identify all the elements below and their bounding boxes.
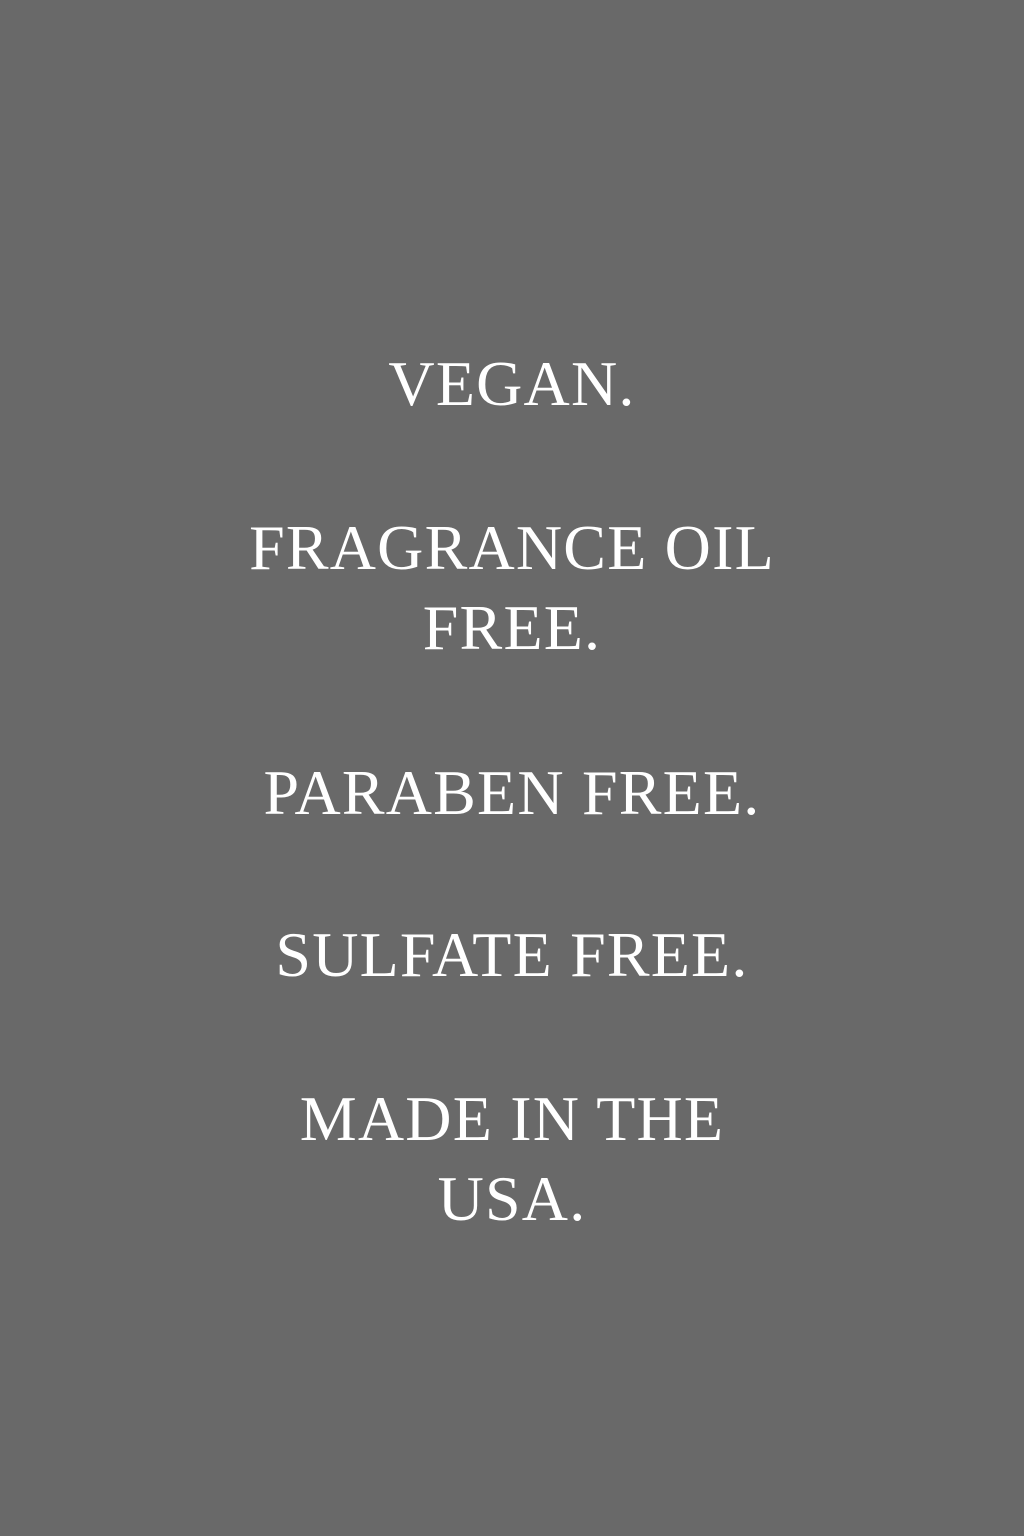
text: fragrance oil free: FRAGRANCE OIL [249,512,775,583]
text: sulfate free: SULFATE FREE. [275,919,749,990]
text: made in the usa: USA. [438,1163,586,1234]
text: fragrance oil free [249,512,775,663]
text: made in the usa [300,1083,724,1234]
text: made in the usa: MADE IN THE [300,1083,724,1154]
text: vegan: VEGAN. [388,348,636,419]
text: paraben free: PARABEN FREE. [264,757,760,828]
text: fragrance oil free: FREE. [423,592,601,663]
